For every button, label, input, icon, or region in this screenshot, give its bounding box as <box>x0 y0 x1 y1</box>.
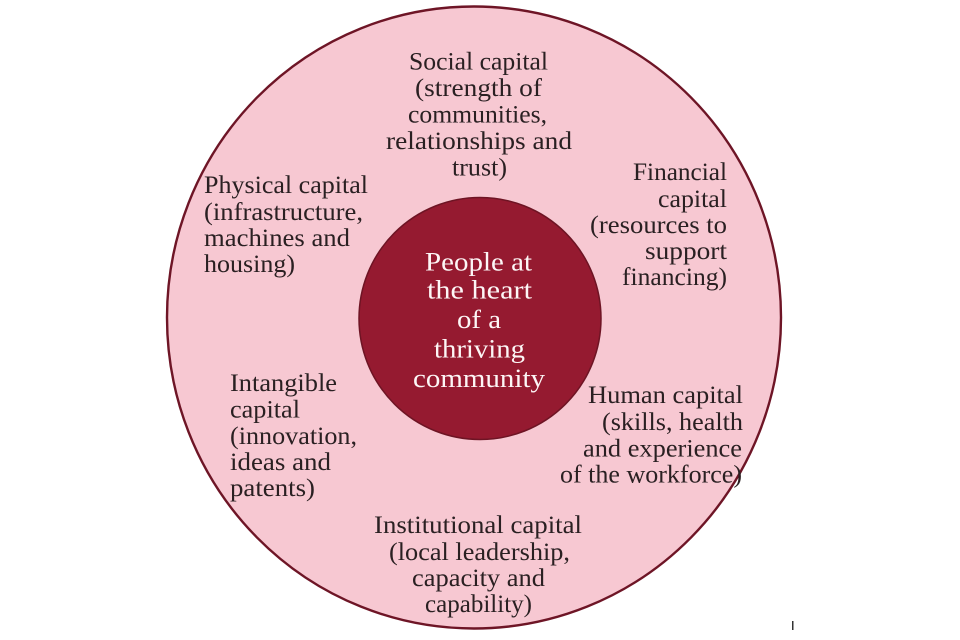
outer circle: capitals <box>167 6 781 628</box>
text: physical capital: Physical capital <box>204 172 368 199</box>
text: human capital <box>560 382 744 488</box>
text: physical capital: machines and <box>204 225 351 252</box>
text: human capital: of the workforce) <box>560 462 742 488</box>
centre label: People at <box>425 248 533 276</box>
text: financial capital: financing) <box>622 264 727 291</box>
text: institutional capital: (local leadership, <box>389 539 570 566</box>
text: social capital: communities, <box>408 102 547 128</box>
text: financial capital: (resources to <box>590 212 727 239</box>
text: physical capital: housing) <box>204 251 295 278</box>
text: human capital: Human capital <box>588 382 743 409</box>
text: institutional capital: capacity and <box>412 565 546 592</box>
centre label: the heart <box>427 276 533 304</box>
centre label <box>413 248 545 393</box>
text: intangible capital: Intangible <box>230 370 337 397</box>
text: financial capital: Financial <box>633 159 727 186</box>
text: institutional capital <box>374 512 582 618</box>
text: social capital: relationships and <box>386 128 573 155</box>
text: financial capital: capital <box>658 186 727 213</box>
text: intangible capital: ideas and <box>230 449 332 476</box>
text: intangible capital: patents) <box>230 475 315 502</box>
text: intangible capital <box>230 370 357 502</box>
inner circle: people at the heart <box>359 198 601 440</box>
text: intangible capital: capital <box>230 396 300 424</box>
text: financial capital: support <box>645 238 727 265</box>
stray mark <box>792 621 794 630</box>
text: institutional capital: capability) <box>425 591 532 618</box>
text: social capital: (strength of <box>415 75 543 102</box>
text: social capital <box>386 48 573 182</box>
centre label: of a <box>457 305 502 334</box>
text: institutional capital: Institutional capital <box>374 512 582 539</box>
text: physical capital <box>204 172 368 278</box>
text: intangible capital: (innovation, <box>230 423 357 450</box>
text: social capital: Social capital <box>409 48 548 76</box>
text: social capital: trust) <box>452 154 507 182</box>
centre label: thriving <box>434 334 525 364</box>
text: human capital: and experience <box>583 436 742 462</box>
text: physical capital: (infrastructure, <box>204 199 363 226</box>
text: financial capital <box>590 159 727 291</box>
centre label: community <box>413 364 545 393</box>
text: human capital: (skills, health <box>602 409 744 436</box>
